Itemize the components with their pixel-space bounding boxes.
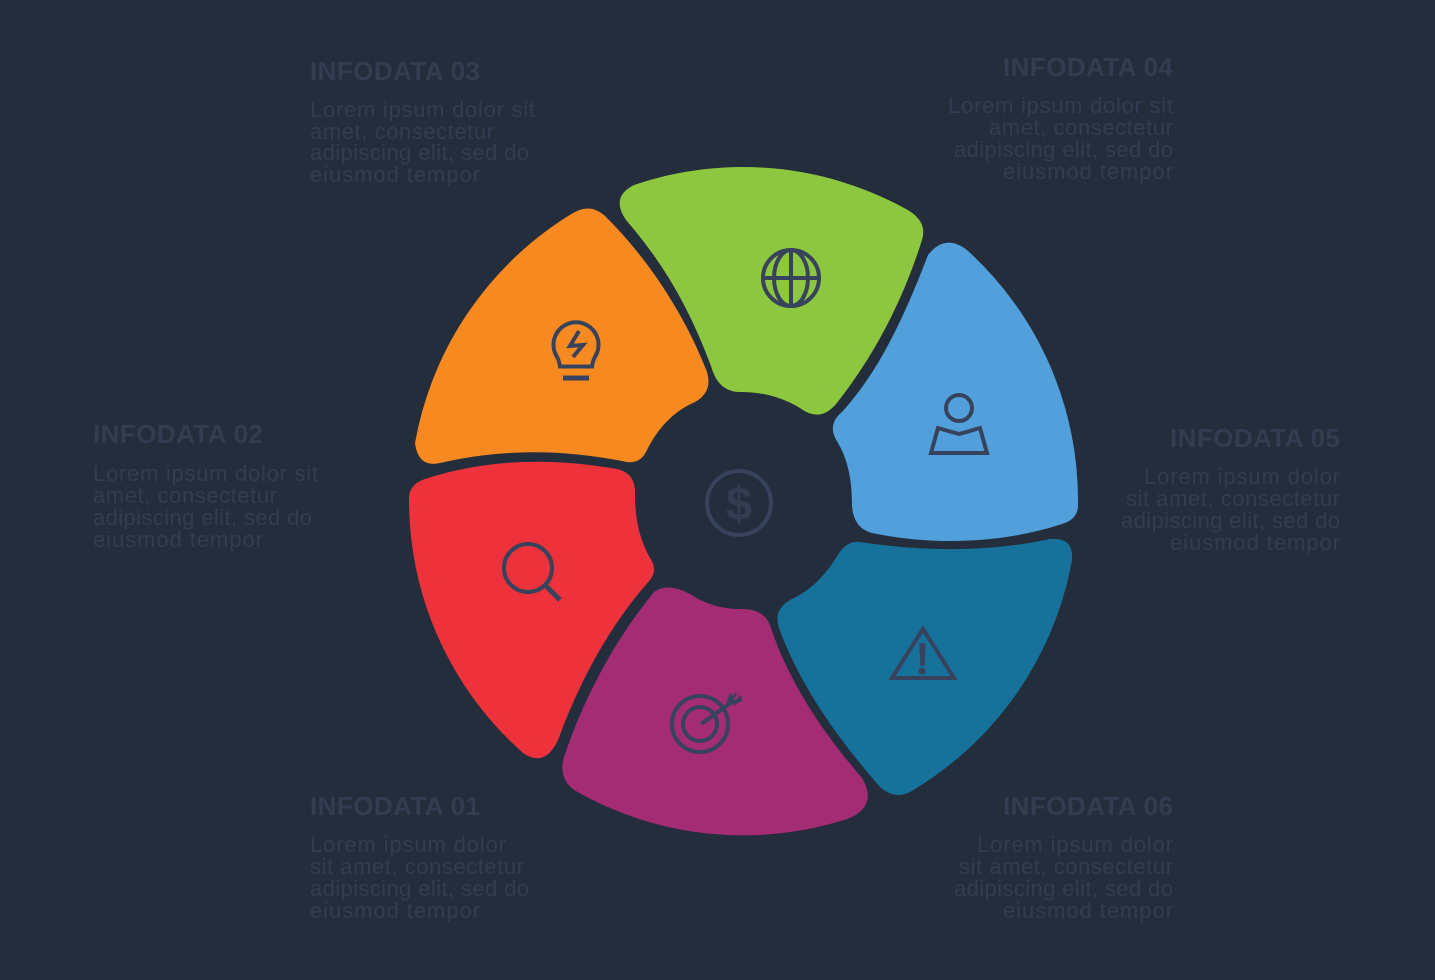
text block: infodata 06: eiusmod tempor xyxy=(1003,898,1173,923)
text block: infodata 01: INFODATA 01 xyxy=(310,791,480,821)
text block: infodata 01: Lorem ipsum dolor xyxy=(310,832,506,857)
text block: infodata 06: INFODATA 06 xyxy=(1003,791,1173,821)
text block: infodata 02: INFODATA 02 xyxy=(93,419,263,449)
icon: warning triangle xyxy=(892,629,954,678)
text block: infodata 05: eiusmod tempor xyxy=(1170,530,1340,555)
segment: red xyxy=(409,462,654,758)
text block: infodata 04: eiusmod tempor xyxy=(1003,159,1173,184)
text block: infodata 02: adipiscing elit, sed do xyxy=(93,505,312,530)
text block: infodata 05: Lorem ipsum dolor xyxy=(1144,464,1340,489)
text block: infodata 02: Lorem ipsum dolor sit xyxy=(93,461,318,486)
segment: purple xyxy=(562,587,868,835)
text block: infodata 04: Lorem ipsum dolor sit xyxy=(948,93,1173,118)
text block: infodata 06: adipiscing elit, sed do xyxy=(954,876,1173,901)
text block: infodata 05 xyxy=(1121,423,1340,555)
text block: infodata 03: INFODATA 03 xyxy=(310,56,480,86)
text block: infodata 03: amet, consectetur xyxy=(310,119,494,144)
text block: infodata 01: eiusmod tempor xyxy=(310,898,480,923)
text block: infodata 05: adipiscing elit, sed do xyxy=(1121,508,1340,533)
segment: orange xyxy=(415,208,708,464)
segment: dark blue xyxy=(777,539,1072,795)
text block: infodata 01: sit amet, consectetur xyxy=(310,854,524,879)
text block: infodata 03: adipiscing elit, sed do xyxy=(310,140,529,165)
text block: infodata 04: adipiscing elit, sed do xyxy=(954,137,1173,162)
text block: infodata 06: Lorem ipsum dolor xyxy=(977,832,1173,857)
icon: magnifier xyxy=(504,544,560,600)
text block: infodata 04: INFODATA 04 xyxy=(1003,52,1174,82)
segment: light blue xyxy=(833,243,1078,541)
text block: infodata 04: amet, consectetur xyxy=(989,115,1173,140)
text block: infodata 03: eiusmod tempor xyxy=(310,162,480,187)
text block: infodata 02: amet, consectetur xyxy=(93,483,277,508)
text block: infodata 03: Lorem ipsum dolor sit xyxy=(310,97,535,122)
text block: infodata 02: eiusmod tempor xyxy=(93,527,263,552)
icon: light bulb xyxy=(554,322,598,378)
text block: infodata 02 xyxy=(93,419,318,552)
text block: infodata 06 xyxy=(954,791,1173,923)
text block: infodata 01: adipiscing elit, sed do xyxy=(310,876,529,901)
text block: infodata 05: INFODATA 05 xyxy=(1170,423,1340,453)
text block: infodata 05: sit amet, consectetur xyxy=(1126,486,1340,511)
icon: globe xyxy=(763,250,819,306)
center icon: dollar xyxy=(707,471,771,535)
icon: map pin person xyxy=(931,395,987,453)
text block: infodata 01 xyxy=(310,791,529,923)
segment: green xyxy=(620,167,923,415)
text block: infodata 04 xyxy=(948,52,1174,184)
text block: infodata 06: sit amet, consectetur xyxy=(959,854,1173,879)
center icon: dollar: $ xyxy=(726,477,752,530)
icon: target xyxy=(672,693,742,752)
text block: infodata 03 xyxy=(310,56,535,187)
